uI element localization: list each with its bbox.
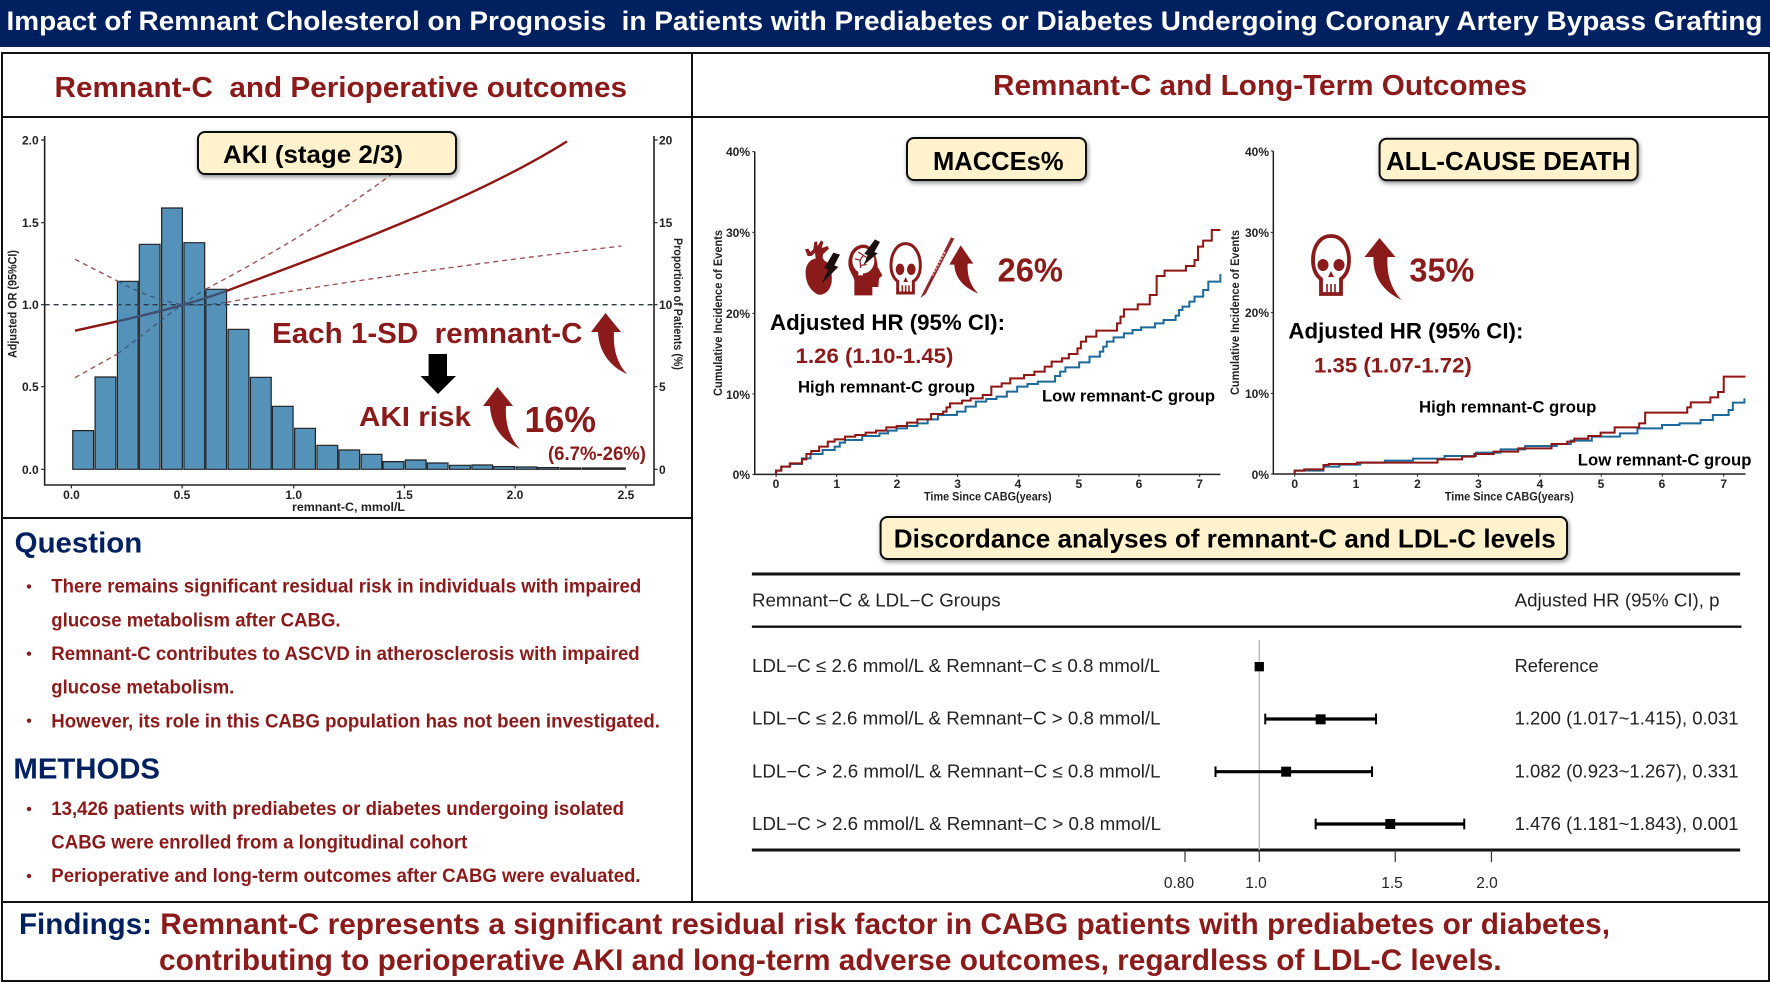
chart: AKI restricted cubic spline with histogram: 0.0 <box>63 488 80 502</box>
chart: MACCEs cumulative incidence: 30% <box>726 226 750 240</box>
panel: findings <box>2 902 1769 981</box>
chart: MACCEs cumulative incidence: 40% <box>726 145 750 159</box>
chart: MACCEs cumulative incidence: 0 <box>773 477 780 491</box>
text block: methods bullets: 13,426 patients with prediabetes or diabetes undergoing isolated <box>51 798 624 820</box>
chart: MACCEs cumulative incidence: 6 <box>1136 477 1143 491</box>
icon: curved up arrow <box>1364 238 1402 300</box>
chart: AKI restricted cubic spline with histogram: 2.0 <box>22 134 39 148</box>
chart: MACCEs cumulative incidence: 0% <box>733 468 750 482</box>
panel: perioperative outcomes <box>2 53 692 518</box>
chart: AKI restricted cubic spline with histogram: 1.0 <box>285 488 302 502</box>
chart: all-cause death cumulative incidence: 6 <box>1659 477 1666 491</box>
chart: all-cause death cumulative incidence: 3 <box>1475 477 1482 491</box>
text block: question bullets: Remnant-C contributes to ASCVD in atherosclerosis with impaired <box>51 643 640 665</box>
stat: 16 percent: 16% <box>524 399 596 440</box>
chart: AKI restricted cubic spline with histogram: 15 <box>659 216 673 230</box>
stat: confidence interval: (6.7%-26%) <box>548 444 646 465</box>
stat: 35 percent: 35% <box>1409 252 1474 289</box>
icon: black down arrow <box>420 354 456 394</box>
chart: all-cause death cumulative incidence: 20% <box>1245 306 1269 320</box>
chart: AKI restricted cubic spline with histogram: 0.5 <box>22 380 39 394</box>
chart: AKI restricted cubic spline with histogram: 2.0 <box>507 488 524 502</box>
chart: all-cause death cumulative incidence: 1 <box>1353 477 1360 491</box>
heading: question: Question <box>15 528 142 560</box>
text: findings statement <box>159 908 1610 977</box>
chart: AKI restricted cubic spline with histogram: 2.5 <box>618 488 635 502</box>
text: death adjusted HR label: Adjusted HR (95% CI): <box>1288 319 1523 344</box>
chart: AKI restricted cubic spline with histogram: remnant-C, mmol/L <box>292 500 405 514</box>
text: MACCEs adjusted HR label: Adjusted HR (95% CI): <box>770 310 1005 335</box>
label box: discordance analyses: Discordance analyses of remnant-C and LDL-C levels <box>894 523 1556 553</box>
icon group: heart, brain, skull, arrow <box>805 237 978 298</box>
text block: question bullets: However, its role in this CABG population has not been investigated. <box>51 710 660 732</box>
chart: MACCEs cumulative incidence: 2 <box>894 477 901 491</box>
callout: each 1-SD remnant-C: Each 1-SD remnant-C <box>272 318 583 350</box>
text block: methods bullets <box>27 798 641 887</box>
chart: AKI restricted cubic spline with histogram: 0.5 <box>174 488 191 502</box>
label box: all-cause death: ALL-CAUSE DEATH <box>1386 146 1630 176</box>
text: MACCEs adjusted HR value: 1.26 (1.10-1.45) <box>796 345 953 368</box>
text: death adjusted HR value: 1.35 (1.07-1.72) <box>1314 355 1472 378</box>
text: findings statement: contributing to perioperative AKI and long-term adverse outcomes, regardless of LDL-C levels. <box>159 944 1502 977</box>
forest plot rows: 1.082 (0.923~1.267), 0.331 <box>1515 761 1739 781</box>
chart: MACCEs cumulative incidence: 4 <box>1015 477 1022 491</box>
icon: heart with lightning <box>805 240 840 295</box>
chart: MACCEs cumulative incidence: Time Since CABG(years) <box>924 490 1052 504</box>
forest plot header: Adjusted HR (95% CI), p <box>1515 591 1720 611</box>
heading: methods: METHODS <box>13 754 160 786</box>
chart: MACCEs cumulative incidence: 10% <box>726 388 750 402</box>
chart: AKI restricted cubic spline with histogram: 1.5 <box>396 488 413 502</box>
chart: MACCEs cumulative incidence: 20% <box>726 307 750 321</box>
chart: MACCEs cumulative incidence: 5 <box>1075 477 1082 491</box>
text block: methods bullets: Perioperative and long-term outcomes after CABG were evaluated. <box>51 865 641 887</box>
text: findings label: Findings: <box>19 908 152 941</box>
forest plot rows: 1.476 (1.181~1.843), 0.001 <box>1515 814 1739 834</box>
stat: 26 percent: 26% <box>998 252 1063 289</box>
chart: all-cause death cumulative incidence: 5 <box>1598 477 1605 491</box>
chart: MACCEs cumulative incidence: Cumulative Incidence of Events <box>711 230 725 396</box>
forest plot rows: Reference <box>1515 656 1599 676</box>
panel: long-term outcomes <box>692 53 1769 902</box>
label box: AKI stage: AKI (stage 2/3) <box>223 141 403 169</box>
chart: MACCEs cumulative incidence <box>711 145 1220 504</box>
heading: perioperative outcomes: Remnant-C and Perioperative outcomes <box>54 72 627 104</box>
chart: AKI restricted cubic spline with histogram: Proportion of Patients (%) <box>671 238 685 370</box>
label box: AKI stage <box>198 132 456 174</box>
forest plot rows: LDL−C ≤ 2.6 mmol/L & Remnant−C > 0.8 mmol/L <box>752 709 1160 729</box>
legend: high group death: High remnant-C group <box>1419 399 1596 417</box>
label box: MACCEs <box>907 138 1086 180</box>
chart: forest plot <box>752 574 1741 892</box>
icon: head with brain and lightning <box>848 239 882 295</box>
label box: discordance analyses <box>881 517 1567 559</box>
text block: question bullets: glucose metabolism. <box>51 676 234 698</box>
chart: all-cause death cumulative incidence: Time Since CABG(years) <box>1445 490 1574 504</box>
icon: curved up arrow <box>949 245 978 294</box>
chart: AKI restricted cubic spline with histogram: 5 <box>659 380 666 394</box>
chart: AKI restricted cubic spline with histogram: 0 <box>659 463 666 477</box>
chart: all-cause death cumulative incidence: 2 <box>1414 477 1421 491</box>
chart: all-cause death cumulative incidence: 7 <box>1720 477 1727 491</box>
chart: all-cause death cumulative incidence <box>1228 145 1745 504</box>
chart: all-cause death cumulative incidence: 0% <box>1252 468 1269 482</box>
forest plot rows: LDL−C ≤ 2.6 mmol/L & Remnant−C ≤ 0.8 mmol/L <box>752 656 1160 676</box>
label box: MACCEs: MACCEs% <box>933 146 1064 176</box>
label box: all-cause death <box>1380 139 1638 180</box>
chart: all-cause death cumulative incidence: Cumulative Incidence of Events <box>1228 230 1242 395</box>
legend: high group MACCEs: High remnant-C group <box>798 379 975 397</box>
forest plot axis labels: 1.5 <box>1381 875 1403 892</box>
text block: question bullets <box>27 576 660 732</box>
icon: skull <box>891 244 920 293</box>
chart: MACCEs cumulative incidence: 7 <box>1196 477 1203 491</box>
chart: AKI restricted cubic spline with histogram: 20 <box>659 134 673 148</box>
forest plot axis labels: 0.80 <box>1164 875 1194 892</box>
icon: curved up arrow <box>483 387 520 449</box>
text block: question bullets: There remains significant residual risk in individuals with impaired <box>51 576 641 598</box>
chart: AKI restricted cubic spline with histogram: 1.0 <box>22 298 39 312</box>
text: findings statement: Remnant-C represents a significant residual risk factor in CABG patients with prediabetes or diabetes, <box>160 908 1610 941</box>
callout: AKI risk: AKI risk <box>359 401 471 432</box>
forest plot rows <box>752 656 1739 834</box>
chart: all-cause death cumulative incidence: 30% <box>1245 226 1269 240</box>
forest plot rows: LDL−C > 2.6 mmol/L & Remnant−C ≤ 0.8 mmol/L <box>752 761 1160 781</box>
chart: AKI restricted cubic spline with histogram: 1.5 <box>22 216 39 230</box>
forest plot axis labels: 1.0 <box>1245 875 1267 892</box>
chart: AKI restricted cubic spline with histogram: 0.0 <box>22 463 39 477</box>
chart: MACCEs cumulative incidence: 3 <box>954 477 961 491</box>
chart: all-cause death cumulative incidence: 4 <box>1537 477 1544 491</box>
icon: skull <box>1313 236 1349 294</box>
chart: all-cause death cumulative incidence: 40% <box>1245 145 1269 159</box>
forest plot rows: 1.200 (1.017~1.415), 0.031 <box>1515 709 1739 729</box>
forest plot rows: LDL−C > 2.6 mmol/L & Remnant−C > 0.8 mmol/L <box>752 814 1161 834</box>
chart: AKI restricted cubic spline with histogram: Adjusted OR (95%CI) <box>6 250 20 358</box>
forest plot axis labels: 2.0 <box>1476 875 1498 892</box>
title bar: Impact of Remnant Cholesterol on Prognosis in Patients with Prediabetes or Diabetes Undergoing Coronary Artery Bypass Grafting <box>6 6 1763 36</box>
forest plot axis labels <box>1164 875 1498 892</box>
forest plot header: Remnant−C & LDL−C Groups <box>752 591 1001 611</box>
panel: question and methods <box>2 518 692 902</box>
heading: long-term outcomes: Remnant-C and Long-Term Outcomes <box>993 70 1527 102</box>
legend: low group death: Low remnant-C group <box>1578 452 1751 470</box>
icon: slash divider <box>920 237 954 298</box>
chart: AKI restricted cubic spline with histogram: 10 <box>659 298 673 312</box>
text block: methods bullets: CABG were enrolled from a longitudinal cohort <box>51 832 468 854</box>
legend: low group MACCEs: Low remnant-C group <box>1042 388 1215 406</box>
chart: MACCEs cumulative incidence: 1 <box>833 477 840 491</box>
forest plot header <box>752 591 1720 611</box>
text block: question bullets: glucose metabolism after CABG. <box>51 610 341 632</box>
chart: all-cause death cumulative incidence: 0 <box>1291 477 1298 491</box>
title bar <box>0 0 1770 47</box>
icon: curved up arrow <box>591 313 627 374</box>
chart: all-cause death cumulative incidence: 10% <box>1245 387 1269 401</box>
chart: AKI restricted cubic spline with histogram <box>6 134 685 514</box>
